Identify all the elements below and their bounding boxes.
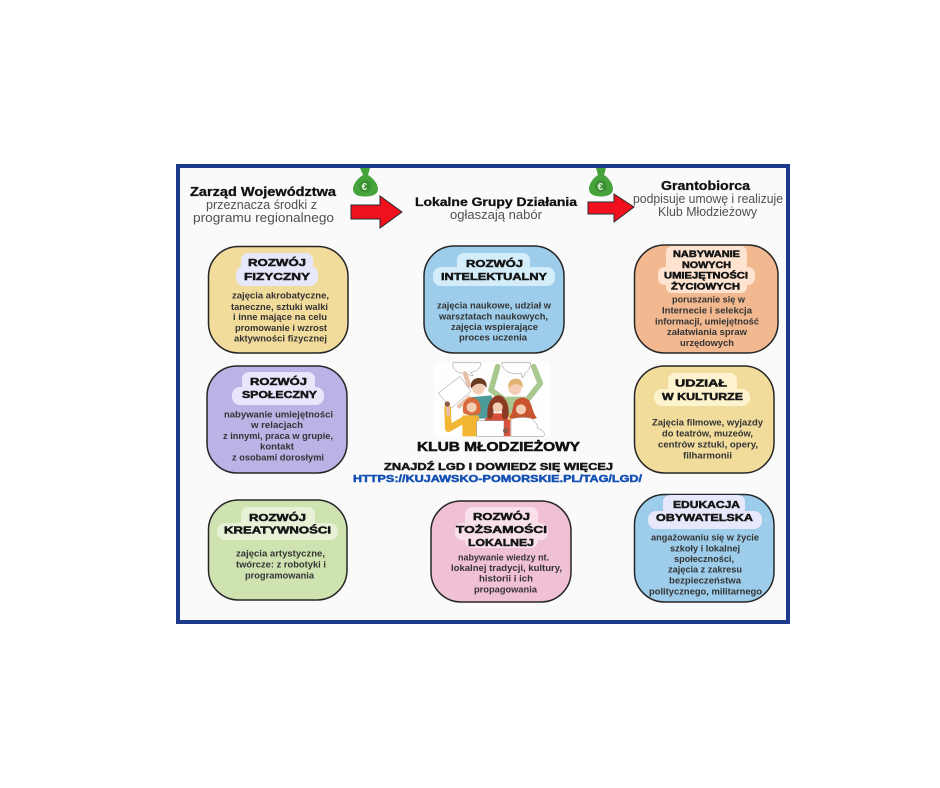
step 3: Grantobiorca: Klub Młodzieżowy	[658, 204, 757, 219]
body text: rozwój tożsamości lokalnej: nabywanie wiedzy nt.	[458, 552, 549, 564]
body text: rozwój fizyczny: i inne mające na celu	[233, 312, 327, 323]
heading badge: rozwój tożsamości lokalnej: TOŻSAMOŚCI	[456, 523, 547, 536]
body text: rozwój społeczny: z osobami dorosłymi	[232, 452, 324, 464]
body text: rozwój fizyczny: taneczne, sztuki walki	[231, 302, 328, 313]
heading badge: udział w kulturze: UDZIAŁ	[675, 378, 728, 390]
body text: rozwój społeczny	[223, 410, 333, 464]
body text: rozwój kreatywności: programowania	[245, 570, 315, 582]
step 3: Grantobiorca	[633, 179, 783, 219]
heading badge: rozwój fizyczny	[236, 253, 318, 286]
step 2: Lokalne Grupy Działania: ogłaszają nabór	[450, 207, 543, 222]
heading badge: nabywanie nowych umiejętności życiowych: NABYWANIE	[673, 249, 740, 260]
heading badge: nabywanie nowych umiejętności życiowych: NOWYCH	[682, 260, 731, 271]
heading badge: rozwój intelektualny: ROZWÓJ	[466, 257, 523, 270]
heading badge: rozwój tożsamości lokalnej: ROZWÓJ	[473, 510, 530, 523]
heading badge: nabywanie nowych umiejętności życiowych	[658, 246, 755, 293]
body text: rozwój społeczny: nabywanie umiejętności	[224, 410, 333, 420]
heading badge: rozwój tożsamości lokalnej: LOKALNEJ	[468, 537, 534, 549]
step 3: Grantobiorca: podpisuje umowę i realizuje	[633, 191, 783, 206]
panel: rozwój społeczny	[207, 366, 347, 473]
body text: rozwój tożsamości lokalnej	[451, 552, 562, 596]
body text: rozwój intelektualny: zajęcia wspierające	[451, 322, 538, 333]
heading badge: rozwój kreatywności: ROZWÓJ	[249, 511, 306, 524]
step 2: Lokalne Grupy Działania	[415, 195, 577, 222]
body text: rozwój społeczny: z innymi, praca w grupie,	[223, 431, 333, 442]
heading badge: rozwój społeczny: ROZWÓJ	[250, 375, 307, 388]
body text: rozwój intelektualny: zajęcia naukowe, udział w	[437, 300, 552, 312]
heading badge: nabywanie nowych umiejętności życiowych: ŻYCIOWYCH	[671, 282, 740, 292]
step 1: Zarząd Województwa: przeznacza środki z	[206, 197, 317, 212]
body text: rozwój fizyczny: promowanie i wzrost	[235, 323, 328, 334]
body text: edukacja obywatelska: angażowaniu się w życie	[651, 532, 759, 544]
body text: rozwój społeczny: w relacjach	[250, 420, 303, 431]
heading badge: rozwój intelektualny: INTELEKTUALNY	[441, 271, 547, 283]
step 1: Zarząd Województwa	[190, 185, 337, 225]
heading badge: edukacja obywatelska: OBYWATELSKA	[656, 512, 753, 524]
body text: edukacja obywatelska: bezpieczeństwa	[669, 576, 742, 586]
body text: rozwój fizyczny: aktywności fizycznej	[234, 334, 327, 344]
body text: rozwój intelektualny	[437, 300, 552, 344]
heading badge: edukacja obywatelska: EDUKACJA	[673, 499, 740, 511]
icon: money bag 2	[589, 168, 613, 196]
step 1: Zarząd Województwa: programu regionalnego	[193, 210, 334, 225]
body text: udział w kulturze	[652, 418, 764, 462]
icon: money bag 1: €	[362, 182, 368, 193]
body text: nabywanie umiejętności: urzędowych	[680, 338, 734, 349]
body text: rozwój tożsamości lokalnej: lokalnej tradycji, kultury,	[451, 563, 562, 574]
body text: udział w kulturze: Zajęcia filmowe, wyjazdy	[652, 418, 764, 428]
panel: rozwój kreatywności	[208, 500, 347, 600]
body text: rozwój tożsamości lokalnej: historii i ich	[479, 574, 533, 584]
heading: Klub Młodzieżowy: KLUB MŁODZIEŻOWY	[417, 439, 581, 454]
panel: rozwój fizyczny	[208, 246, 348, 353]
body text: rozwój kreatywności: twórcze: z robotyki i	[236, 560, 326, 570]
heading badge: edukacja obywatelska	[648, 495, 762, 529]
step 1: Zarząd Województwa: Zarząd Województwa	[190, 185, 337, 199]
body text: rozwój społeczny: kontakt	[260, 442, 295, 452]
panel: nabywanie nowych umiejętności życiowych	[634, 245, 778, 353]
body text: nabywanie umiejętności: załatwiania spraw	[667, 327, 748, 338]
panel: rozwój tożsamości lokalnej	[431, 501, 571, 602]
frame panel	[178, 166, 788, 622]
icon: money bag 1	[353, 168, 378, 196]
body text: nabywanie umiejętności: Internecie i selekcja	[662, 306, 753, 316]
body text: rozwój fizyczny: zajęcia akrobatyczne,	[232, 290, 329, 302]
heading badge: rozwój kreatywności: KREATYWNOŚCI	[224, 524, 331, 536]
body text: rozwój tożsamości lokalnej: propagowania	[474, 584, 538, 596]
heading badge: rozwój fizyczny: FIZYCZNY	[244, 271, 310, 283]
panel: rozwój intelektualny	[424, 246, 564, 353]
body text: edukacja obywatelska	[649, 532, 762, 598]
body text: edukacja obywatelska: szkoły i lokalnej	[670, 544, 740, 554]
heading badge: udział w kulturze: W KULTURZE	[662, 391, 743, 403]
body text: edukacja obywatelska: politycznego, militarnego	[649, 586, 762, 598]
arrow 2	[588, 194, 634, 222]
body text: rozwój fizyczny	[231, 290, 329, 344]
heading badge: rozwój fizyczny: ROZWÓJ	[248, 256, 306, 269]
body text: nabywanie umiejętności: informacji, umiejętność	[655, 316, 759, 328]
body text: nabywanie umiejętności: poruszanie się w	[672, 294, 746, 306]
body text: edukacja obywatelska: zajęcia z zakresu	[668, 564, 742, 576]
illustration: group of young people with signs	[435, 363, 550, 437]
body text: nabywanie umiejętności	[655, 294, 759, 349]
body text: rozwój kreatywności: zajęcia artystyczne,	[236, 548, 325, 560]
heading badge: rozwój społeczny	[232, 372, 324, 405]
step 3: Grantobiorca: Grantobiorca	[661, 179, 751, 193]
arrow 1	[351, 196, 402, 228]
panel: edukacja obywatelska	[634, 494, 774, 602]
call to action: ZNAJDŹ LGD I DOWIEDZ SIĘ WIĘCEJ	[384, 460, 613, 473]
step 2: Lokalne Grupy Działania: Lokalne Grupy Działania	[415, 195, 577, 209]
body text: udział w kulturze: centrów sztuki, opery,	[658, 440, 758, 450]
heading badge: rozwój społeczny: SPOŁECZNY	[242, 389, 317, 401]
icon: money bag 2: €	[598, 182, 604, 193]
body text: edukacja obywatelska: społeczności,	[674, 554, 734, 565]
heading badge: rozwój tożsamości lokalnej	[455, 507, 548, 549]
body text: udział w kulturze: do teatrów, muzeów,	[662, 428, 753, 440]
body text: udział w kulturze: filharmonii	[683, 450, 732, 462]
heading badge: udział w kulturze	[654, 373, 750, 406]
link text: HTTPS://KUJAWSKO-POMORSKIE.PL/TAG/LGD/	[353, 473, 642, 485]
body text: rozwój intelektualny: warsztatach naukowych,	[438, 312, 548, 322]
heading badge: rozwój kreatywności	[217, 507, 338, 540]
panel: udział w kulturze	[634, 366, 774, 473]
body text: rozwój intelektualny: proces uczenia	[459, 332, 528, 344]
heading badge: nabywanie nowych umiejętności życiowych: UMIEJĘTNOŚCI	[664, 270, 748, 282]
heading badge: rozwój intelektualny	[433, 253, 555, 286]
body text: rozwój kreatywności	[236, 548, 326, 582]
